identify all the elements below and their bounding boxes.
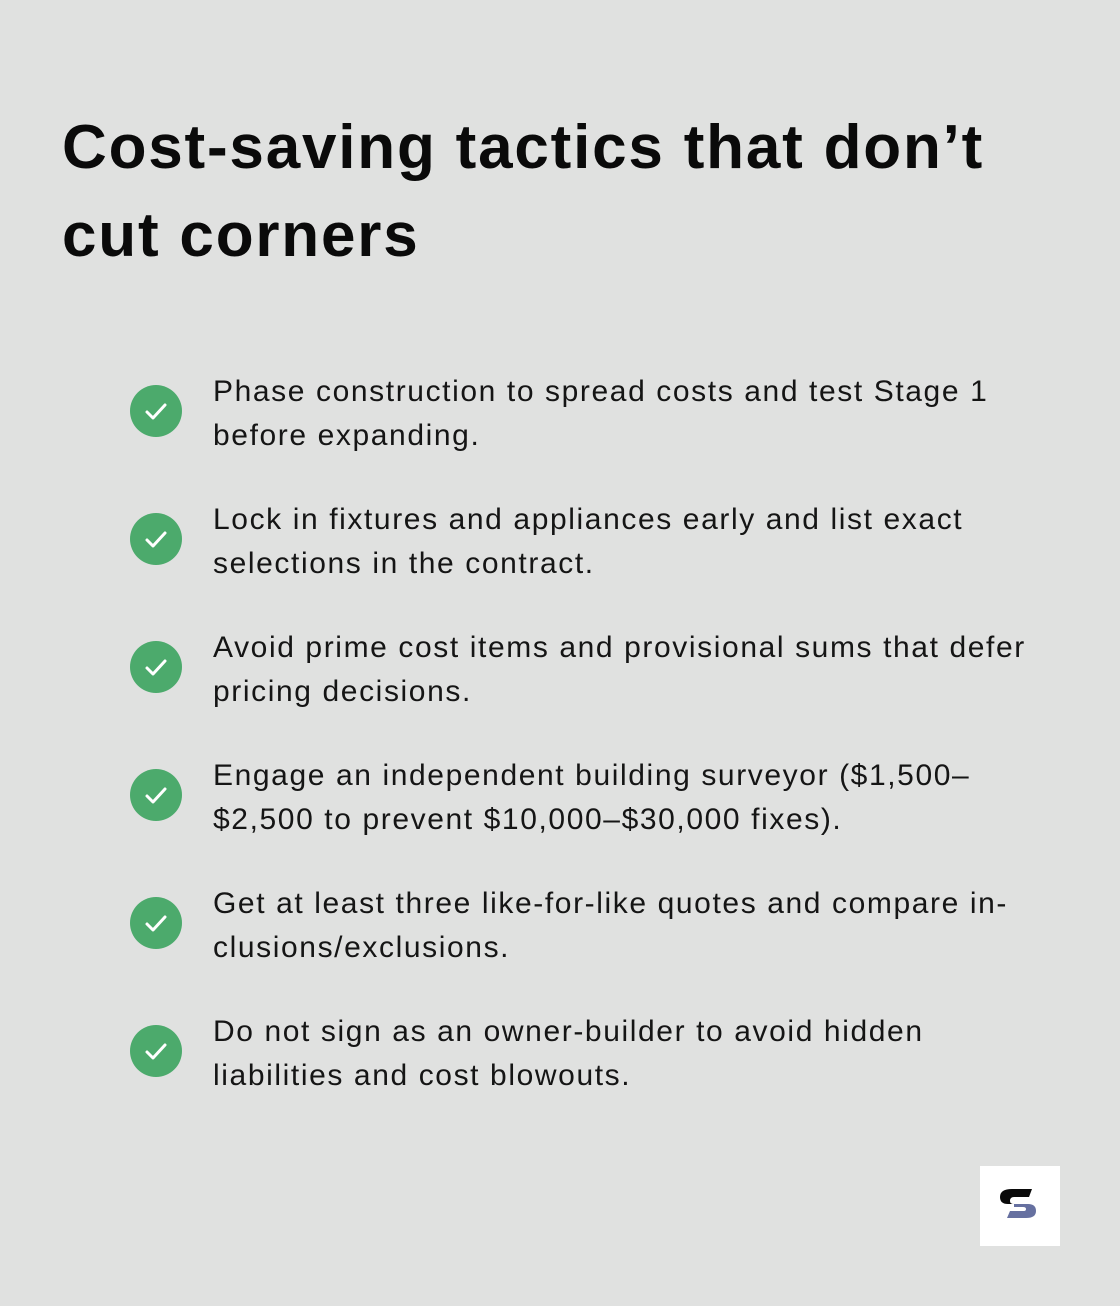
text: before expanding. [213, 419, 480, 452]
icon: check [130, 513, 182, 565]
item 5 [130, 887, 1008, 964]
text [213, 631, 1026, 708]
title: Cost-saving tactics that don’t [62, 113, 984, 182]
icon: check [130, 385, 182, 437]
text [213, 759, 970, 836]
item 6 [130, 1015, 924, 1092]
item 3 [130, 631, 1026, 708]
text: Get at least three like-for-like quotes and compare in- [213, 887, 1008, 920]
icon: check [130, 641, 182, 693]
icon: check [130, 1025, 182, 1077]
text: clusions/exclusions. [213, 931, 510, 964]
text [213, 887, 1008, 964]
text: Avoid prime cost items and provisional sums that defer [213, 631, 1026, 664]
logo [980, 1166, 1060, 1246]
text: liabilities and cost blowouts. [213, 1059, 631, 1092]
title: cut corners [62, 201, 419, 270]
text: Lock in fixtures and appliances early and list exact [213, 503, 963, 536]
text [213, 1015, 924, 1092]
icon: check [130, 897, 182, 949]
item 4 [130, 759, 970, 836]
text: pricing decisions. [213, 675, 472, 708]
text: selections in the contract. [213, 547, 595, 580]
item 2 [130, 503, 963, 580]
text [213, 503, 963, 580]
text: $2,500 to prevent $10,000–$30,000 fixes). [213, 803, 842, 836]
text: Engage an independent building surveyor ($1,500– [213, 759, 970, 792]
icon: check [130, 769, 182, 821]
title [62, 113, 984, 270]
text [213, 375, 988, 452]
item 1 [130, 375, 988, 452]
text: Do not sign as an owner-builder to avoid hidden [213, 1015, 924, 1048]
text: Phase construction to spread costs and test Stage 1 [213, 375, 988, 408]
